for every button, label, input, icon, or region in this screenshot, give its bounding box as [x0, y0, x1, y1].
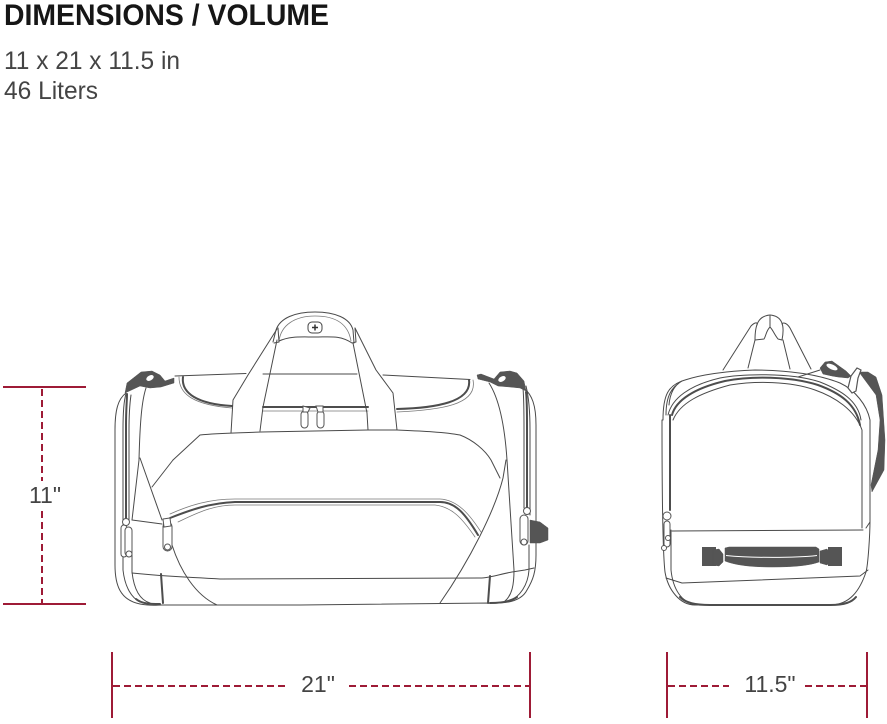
top carry handle [723, 315, 811, 370]
front pocket zipper [170, 499, 481, 537]
shoulder strap [859, 372, 885, 492]
side body outline [662, 370, 870, 605]
strap clip [798, 361, 861, 393]
depth dimension marker [667, 652, 867, 718]
base grab handle [702, 547, 842, 567]
duffel bag front view [115, 312, 548, 605]
dimensions text block: 46 Liters [4, 77, 98, 105]
height dimension marker: 11" [29, 482, 61, 508]
carry handle and straps [231, 312, 397, 433]
logo badge [308, 322, 322, 333]
depth dimension marker: 11.5" [744, 671, 796, 697]
bag body outline [115, 383, 536, 605]
width dimension marker: 21" [301, 671, 335, 697]
top panel and zipper [175, 374, 473, 412]
side zipper pull [662, 512, 671, 550]
zipper pulls [121, 406, 530, 557]
side handle tab [530, 520, 548, 543]
front pocket and panel lines [132, 430, 534, 605]
width dimension marker [112, 652, 530, 718]
height dimension marker [3, 387, 86, 604]
right strap buckle [477, 371, 526, 391]
dimensions text block [4, 47, 180, 105]
duffel bag side view [662, 315, 885, 605]
dimensions text block: 11 x 21 x 11.5 in [4, 47, 180, 75]
left strap buckle [125, 371, 174, 393]
